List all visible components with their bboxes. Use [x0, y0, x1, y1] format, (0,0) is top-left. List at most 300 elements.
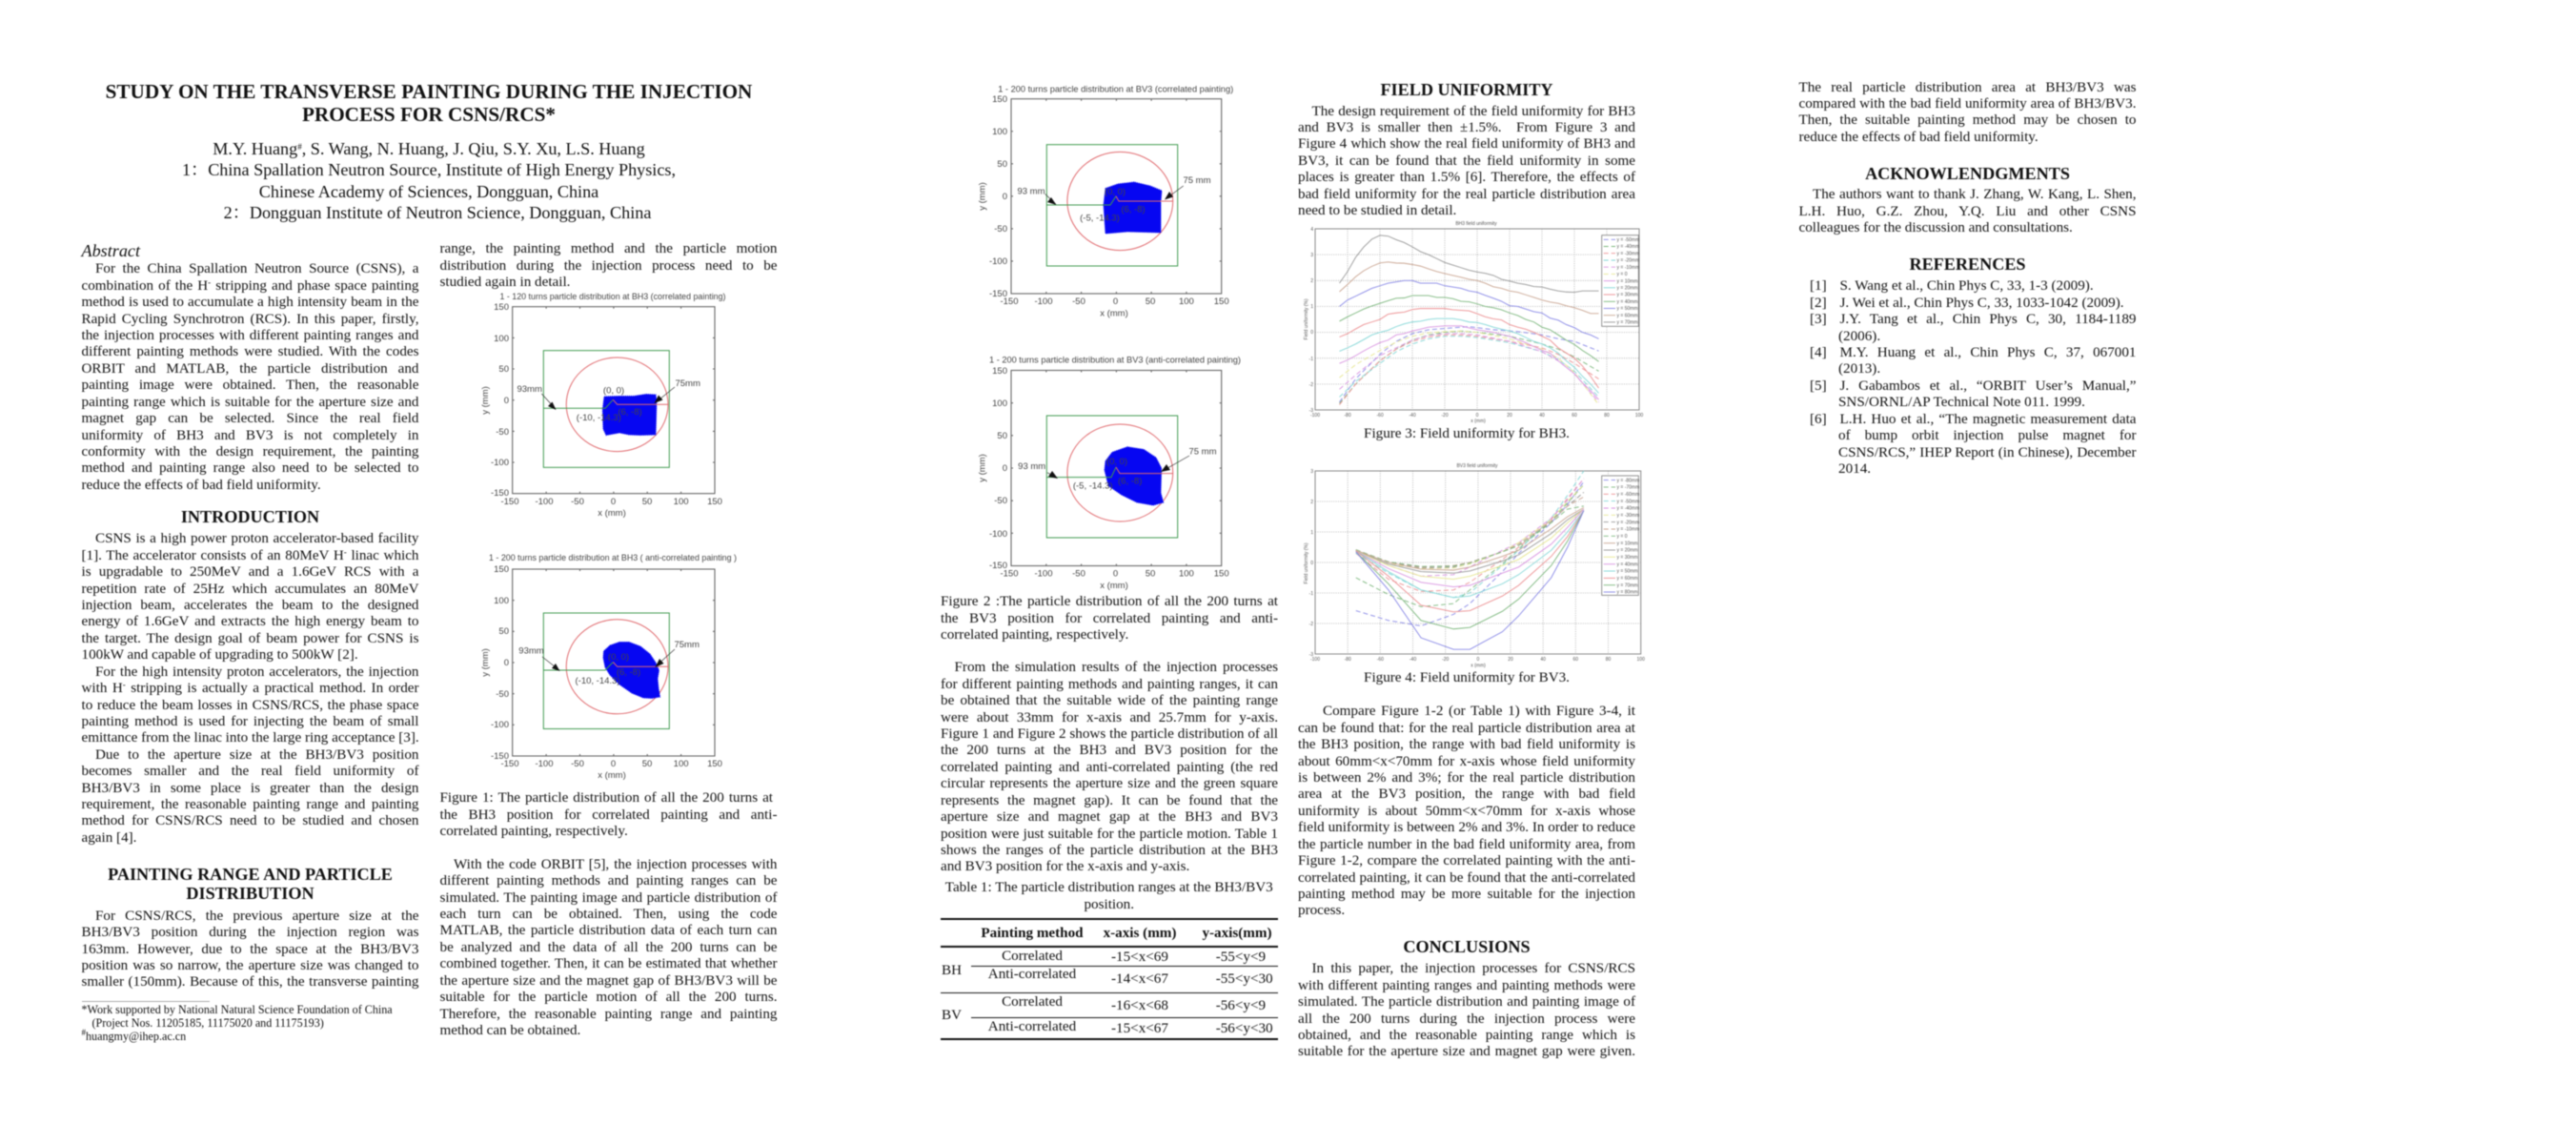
chart: BH3 anti-correlated painting distribution: -150 [491, 751, 509, 762]
chart: BV3 correlated painting distribution: -150 [989, 289, 1007, 299]
chart: BV3 anti-correlated painting distribution: 1 - 200 turns particle distribution at BV3 (anti-correlated painting) [989, 355, 1241, 366]
chart: BH3 field uniformity: 3 [1310, 253, 1313, 258]
chart: BH3 anti-correlated painting distribution: (6, -8) [617, 667, 640, 678]
chart: BH3 correlated painting distribution: y (mm) [480, 386, 491, 415]
chart: BH3 anti-correlated painting distribution: 0 [611, 759, 616, 769]
text: simulation results: the 200 turns at the BH3 and BV3 position for the [941, 743, 1278, 758]
chart: BH3 correlated painting distribution: 50 [642, 497, 652, 507]
chart: BV3 field uniformity: y = 30mm [1616, 555, 1638, 561]
reference numbers: [4] [1810, 345, 1827, 360]
chart: BV3 field uniformity: 60 [1573, 657, 1578, 663]
chart: BH3 field uniformity: y = -10mm [1616, 265, 1639, 271]
chart: BV3 correlated painting distribution: (6, -8) [1121, 204, 1146, 215]
table: particle distribution ranges: -15<x<69 [1111, 950, 1168, 965]
chart: BH3 anti-correlated painting distribution: 100 [494, 596, 509, 606]
reference numbers: [6] [1810, 412, 1827, 427]
chart: BH3 field uniformity: y = 60mm [1616, 313, 1638, 318]
heading: painting range and particle distribution: DISTRIBUTION [186, 884, 314, 903]
chart: BH3 field uniformity: y = 0 [1616, 272, 1628, 277]
text: introduction: to reduce the beam losses in CSNS/RCS, the phase space [82, 698, 419, 713]
chart: BV3 anti-correlated painting distribution: -100 [989, 529, 1007, 540]
text: painting range: For CSNS/RCS, the previous aperture size at the [95, 909, 419, 924]
table: particle distribution ranges: BH [942, 963, 962, 978]
text: introduction: emittance from the linac into the large ring acceptance [3]. [82, 730, 419, 746]
chart: BH3 field uniformity: BH3 field uniformity [1455, 221, 1497, 227]
chart: BV3 anti-correlated painting distribution: 0 [1003, 463, 1007, 474]
chart: BV3 field uniformity: 2 [1310, 500, 1313, 505]
chart: BH3 field uniformity: y = 30mm [1616, 293, 1638, 298]
chart: BV3 field uniformity: x (mm) [1471, 664, 1486, 669]
text: ORBIT simulation [438, 857, 778, 1038]
text: simulation results [940, 660, 1279, 874]
chart: BH3 anti-correlated painting distribution: x (mm) [598, 770, 626, 781]
chart: BH3 correlated painting distribution: 0 [611, 497, 616, 507]
chart: BV3 field uniformity: 3 [1310, 469, 1313, 475]
text: introduction: with H- stripping is actually a practical method. In order [82, 680, 419, 696]
chart: BH3 field uniformity: y = 40mm [1616, 299, 1638, 305]
chart: BV3 anti-correlated painting distribution: -150 [989, 561, 1007, 571]
text: field uniformity: Figure 4 which show the real field uniformity of BH3 and [1298, 136, 1635, 152]
chart: BV3 field uniformity: y = -80mm [1616, 478, 1639, 483]
text: field uniformity: BV3, it can be found that the field uniformity in some [1298, 153, 1635, 169]
chart: BH3 field uniformity: -40 [1409, 413, 1416, 419]
text: ORBIT simulation: combined together. Then, it can be estimated that whether [440, 956, 778, 971]
text: comparison: uniformity is about 50mm<x<70mm for x-axis whose [1298, 804, 1635, 819]
chart: BV3 field uniformity: y = 70mm [1616, 582, 1638, 588]
chart: BH3 anti-correlated painting distribution: -100 [535, 759, 554, 769]
text: simulation results: position were just suitable for the particle motion. Table 1 [941, 827, 1278, 842]
chart: BH3 field uniformity: -2 [1309, 382, 1313, 388]
chart: BV3 anti-correlated painting distribution: (0, 0) [1106, 457, 1127, 467]
text: introduction: method for CSNS/RCS need to be studied and chosen [82, 813, 419, 828]
text: field uniformity: The design requirement of the field uniformity for BH3 [1311, 104, 1635, 119]
text: acknowledgments: colleagues for the discussion and consultations. [1799, 220, 2073, 235]
chart: BH3 field uniformity: y = 10mm [1616, 278, 1638, 284]
text: ORBIT simulation: method can be obtained. [440, 1023, 580, 1038]
chart: BH3 field uniformity: y = 50mm [1616, 306, 1638, 312]
text: field uniformity: bad field uniformity for the real particle distribution area [1298, 187, 1635, 202]
text: abstract: method and painting range also need to be selected to [82, 460, 419, 476]
chart: BV3 correlated painting distribution: -100 [1034, 296, 1053, 307]
chart: BV3 field uniformity: y = 10mm [1616, 541, 1638, 546]
chart: BH3 correlated painting distribution: -50 [571, 497, 584, 507]
chart: BV3 correlated painting distribution [978, 84, 1233, 318]
text: ORBIT simulation: suitable for the particle motion of all the 200 turns. [440, 990, 778, 1005]
text: painting range: smaller (150mm). Because of this, the transverse painting [82, 974, 419, 990]
chart: BV3 field uniformity: BV3 field uniformity [1456, 463, 1498, 469]
authors and affiliations: 2：Dongguan Institute of Neutron Science, Dongguan, China [224, 203, 651, 222]
text: conclusions: simulated. The particle distribution and painting image of [1298, 994, 1635, 1010]
chart: BH3 field uniformity: y = -50mm [1616, 237, 1639, 243]
chart: BH3 anti-correlated painting distribution [480, 553, 738, 781]
chart: BV3 anti-correlated painting distribution: 100 [992, 398, 1007, 409]
reference entries: M.Y. Huang et al., Chin Phys C, 37, 067001 [1839, 345, 2137, 360]
heading: painting range and particle distribution [107, 865, 393, 903]
chart: BH3 correlated painting distribution: 93mm [517, 384, 542, 395]
chart: BV3 correlated painting distribution: -50 [1072, 296, 1085, 307]
text: simulation results: circular represents the aperture size and the green square [941, 776, 1278, 791]
text: introduction: requirement, the reasonable painting range and painting [82, 797, 419, 812]
text: introduction: painting method is used for injecting the beam of small [82, 714, 419, 729]
chart: BH3 correlated painting distribution: -50 [496, 427, 509, 438]
text: comparison: process. [1298, 903, 1345, 918]
chart: BH3 correlated painting distribution: -150 [500, 497, 519, 507]
chart: BH3 field uniformity: 1 [1310, 304, 1313, 310]
text: painting range: 163mm. However, due to the space at the BH3/BV3 [82, 942, 419, 957]
chart: BV3 field uniformity: 0 [1477, 657, 1480, 663]
text: abstract: ORBIT and MATLAB, the particle distribution and [82, 361, 419, 377]
text: introduction: For the high intensity proton accelerators, the injection [95, 664, 419, 680]
text: introduction: repetition rate of 25Hz which accumulates an 80MeV [82, 582, 419, 597]
chart: BH3 field uniformity: 20 [1507, 413, 1512, 419]
text: painting range continued: distribution during the injection process need to be [440, 258, 778, 274]
footnotes: #huangmy@ihep.ac.cn [82, 1028, 186, 1043]
chart: BV3 field uniformity: -1 [1309, 591, 1313, 597]
heading: conclusions: CONCLUSIONS [1403, 937, 1531, 956]
chart: BH3 anti-correlated painting distribution: 50 [498, 626, 509, 637]
chart: BV3 anti-correlated painting distribution [978, 355, 1241, 591]
chart: BV3 field uniformity: 40 [1540, 657, 1546, 663]
chart: BV3 field uniformity: -80 [1345, 657, 1351, 663]
chart: BV3 field uniformity: y = -10mm [1616, 527, 1639, 533]
text: conclusions: all the 200 turns during the injection process were [1298, 1011, 1635, 1027]
text: comparison: field uniformity is between 2% and 3%. In order to reduce [1298, 820, 1635, 835]
authors and affiliations: M.Y. Huang#, S. Wang, N. Huang, J. Qiu, S.Y. Xu, L.S. Huang [213, 139, 645, 158]
table: particle distribution ranges: x-axis (mm) [1104, 926, 1176, 941]
footnotes: *Work supported by National Natural Science Foundation of China [82, 1003, 393, 1016]
caption: figure 2 [940, 594, 1279, 643]
text: ORBIT simulation: the aperture size and the magnet gap of BH3/BV3 will be [440, 973, 778, 989]
chart: BH3 correlated painting distribution: 100 [494, 334, 509, 344]
text: introduction: 100kW and capable of upgrading to 500kW [2]. [82, 647, 358, 663]
text: painting range [81, 909, 419, 990]
chart: BV3 anti-correlated painting distribution: 75 mm [1188, 446, 1217, 458]
chart: BV3 field uniformity: -2 [1309, 622, 1313, 627]
chart: BH3 field uniformity: -1 [1309, 357, 1313, 362]
table: particle distribution ranges: Anti-correlated [988, 967, 1076, 982]
table: particle distribution ranges: -15<x<67 [1111, 1021, 1168, 1036]
chart: BV3 field uniformity: 20 [1508, 657, 1513, 663]
text: ORBIT simulation: be analyzed and the data of all the 200 turns can be [440, 940, 778, 955]
text: introduction: the target. The design goal of beam power for CSNS is [82, 631, 419, 646]
chart: BV3 field uniformity: y = 60mm [1616, 576, 1638, 582]
chart: BV3 field uniformity: -40 [1410, 657, 1416, 663]
heading: painting range and particle distribution: PAINTING RANGE AND PARTICLE [108, 865, 393, 884]
text: painting range: BH3/BV3 position during the injection region was [82, 925, 419, 940]
text: ORBIT simulation: different painting methods and painting ranges can be [440, 873, 778, 889]
reference entries: J.Y. Tang et al., Chin Phys C, 30, 1184-1189 [1839, 312, 2137, 327]
text: abstract: painting image were obtained. Then, the reasonable [82, 378, 419, 393]
text: comparison: painting method may be more suitable for the injection [1298, 887, 1635, 902]
chart: BH3 anti-correlated painting distribution: 75mm [674, 640, 700, 650]
chart: BH3 field uniformity: 2 [1310, 278, 1313, 284]
text: introduction: again [4]. [82, 830, 136, 846]
text: conclusions: suitable for the aperture size and magnet gap were given. [1298, 1044, 1635, 1059]
text: abstract: combination of the H- stripping and phase space painting [82, 277, 418, 294]
title: PROCESS FOR CSNS/RCS* [302, 103, 556, 126]
chart: BV3 correlated painting distribution: -150 [1000, 296, 1019, 307]
reference entries: (2013). [1838, 361, 1880, 377]
text: introduction [81, 531, 419, 846]
chart: BH3 anti-correlated painting distribution: 150 [494, 564, 509, 575]
chart: BV3 anti-correlated painting distribution: (-5, -14.3) [1073, 480, 1113, 492]
chart: BH3 field uniformity: y = 20mm [1616, 286, 1638, 292]
caption: figure 1: Figure 1: The particle distribution of all the 200 turns at [440, 790, 773, 806]
chart: BH3 field uniformity: -100 [1310, 413, 1320, 419]
text: ORBIT simulation: With the code ORBIT [5], the injection processes with [454, 857, 778, 872]
reference entries: (2006). [1838, 329, 1880, 344]
text: abstract: For the China Spallation Neutron Source (CSNS), a [95, 261, 419, 276]
table: particle distribution ranges: Correlated [1002, 993, 1063, 1009]
chart: BV3 correlated painting distribution: 1 - 200 turns particle distribution at BV3 (correlated painting) [998, 84, 1233, 95]
reference numbers: [2] [1810, 296, 1827, 311]
chart: BH3 anti-correlated painting distribution: 0 [504, 658, 509, 668]
text: comparison [1298, 704, 1635, 918]
reference entries: J. Wei et al., Chin Phys C, 33, 1033-1042 (2009). [1839, 296, 2124, 311]
text: abstract: uniformity of BH3 and BV3 is not completely in [82, 428, 419, 443]
text: simulation results: correlated painting and anti-correlated painting (the red [941, 760, 1278, 775]
chart: BV3 field uniformity: y = -20mm [1616, 520, 1639, 525]
chart: BH3 anti-correlated painting distribution: -50 [571, 759, 584, 769]
chart: BH3 correlated painting distribution: 50 [498, 364, 509, 375]
text: introduction: [1]. The accelerator consists of an 80MeV H- linac which [82, 547, 419, 563]
table: particle distribution ranges: -56<y<9 [1216, 998, 1266, 1013]
chart: BH3 correlated painting distribution: (6, -8) [618, 407, 642, 418]
text: comparison: is between 2% and 3%; for the real particle distribution [1298, 770, 1635, 786]
text: acknowledgments: The authors want to thank J. Zhang, W. Kang, L. Shen, [1813, 187, 2137, 202]
chart: BV3 correlated painting distribution: 100 [992, 127, 1007, 137]
caption: figure 3: Figure 3: Field uniformity for BH3. [1364, 426, 1570, 441]
footnotes: (Project Nos. 11205185, 11175020 and 11175193) [91, 1016, 324, 1030]
chart: BH3 field uniformity: -60 [1376, 413, 1384, 419]
chart: BH3 field uniformity: -20 [1441, 413, 1449, 419]
chart: BV3 correlated painting distribution: -100 [989, 256, 1007, 267]
text: introduction: becomes smaller and the real field uniformity of [82, 764, 419, 779]
chart: BH3 anti-correlated painting distribution: 50 [642, 759, 652, 769]
chart: BV3 field uniformity: 80 [1606, 657, 1611, 663]
chart: BH3 correlated painting distribution [480, 292, 726, 519]
table: particle distribution ranges: BV [942, 1008, 962, 1023]
chart: BV3 field uniformity: y = -40mm [1616, 506, 1639, 512]
caption: table 1 [944, 880, 1273, 912]
authors and affiliations: 1：China Spallation Neutron Source, Institute of High Energy Physics, [182, 160, 676, 179]
text: conclusions continued: compared with the bad field uniformity area of BH3/BV3. [1799, 96, 2137, 112]
chart: BV3 anti-correlated painting distribution: 100 [1179, 568, 1194, 580]
chart: BV3 anti-correlated painting distribution: 0 [1113, 568, 1118, 580]
chart: BH3 correlated painting distribution: 1 - 120 turns particle distribution at BH3 (correlated painting) [499, 292, 726, 302]
chart: BV3 field uniformity: y = 40mm [1616, 562, 1638, 567]
text: introduction: injection beam, accelerates the beam to the designed [82, 598, 419, 613]
chart: BV3 anti-correlated painting distribution: -50 [1072, 568, 1085, 580]
reference entries: L.H. Huo et al., “The magnetic measurement data [1839, 412, 2137, 427]
chart: BV3 correlated painting distribution: y (mm) [978, 182, 987, 211]
reference entries: of bump orbit injection pulse magnet for [1838, 428, 2137, 443]
text: conclusions: obtained, and the reasonable painting range which is [1298, 1028, 1635, 1043]
chart: BV3 correlated painting distribution: 50 [997, 159, 1007, 170]
chart: BH3 field uniformity: y = -40mm [1616, 244, 1639, 250]
table: particle distribution ranges: Painting method [981, 926, 1084, 941]
chart: BV3 correlated painting distribution: x (mm) [1100, 309, 1128, 318]
text: conclusions continued [1797, 80, 2137, 145]
text: abstract: Rapid Cycling Synchrotron (RCS). In this paper, firstly, [82, 312, 419, 327]
table: particle distribution ranges: -55<y<9 [1216, 950, 1266, 965]
text: conclusions: In this paper, the injection processes for CSNS/RCS [1311, 961, 1635, 976]
text: simulation results: were about 33mm for x-axis and 25.7mm for y-axis. [941, 710, 1278, 725]
chart: BH3 anti-correlated painting distribution: 1 - 200 turns particle distribution at BH3 ( anti-correlated painting ) [489, 553, 737, 563]
text: field uniformity [1298, 104, 1636, 218]
footnotes [81, 1001, 393, 1043]
chart: BH3 correlated painting distribution: -150 [491, 488, 509, 499]
chart: BV3 field uniformity: y = 80mm [1616, 590, 1638, 596]
text: introduction: Due to the aperture size at the BH3/BV3 position [95, 747, 419, 763]
chart: BH3 field uniformity: 40 [1539, 413, 1545, 419]
text: field uniformity: places is greater than 1.5% [6]. Therefore, the effects of [1298, 170, 1635, 185]
text: introduction: energy of 1.6GeV and extracts the high energy beam to [82, 614, 419, 629]
chart: BH3 correlated painting distribution: 0 [504, 396, 509, 406]
caption: figure 1: correlated painting, respectively. [440, 824, 628, 839]
chart: BV3 field uniformity: 1 [1310, 530, 1313, 536]
reference numbers [1810, 278, 1827, 427]
caption: table 1: position. [1084, 897, 1134, 912]
chart: BH3 field uniformity [1303, 220, 1644, 424]
text: abstract: the injection processes with different painting ranges and [82, 328, 419, 343]
authors and affiliations: Chinese Academy of Sciences, Dongguan, China [259, 182, 598, 201]
text: simulation results: From the simulation results of the injection processes [955, 660, 1278, 675]
chart: BV3 correlated painting distribution: 150 [1214, 296, 1229, 307]
chart: BV3 field uniformity: y = -30mm [1616, 513, 1639, 519]
table: particle distribution ranges: -16<x<68 [1111, 998, 1168, 1013]
chart: BH3 field uniformity: -3 [1309, 408, 1313, 414]
chart: BV3 anti-correlated painting distribution: y (mm) [978, 454, 987, 482]
chart: BV3 field uniformity: -3 [1309, 652, 1313, 658]
title: STUDY ON THE TRANSVERSE PAINTING DURING THE INJECTION [106, 80, 752, 103]
text: painting range continued: range, the painting method and the particle motion [440, 241, 778, 256]
chart: BH3 anti-correlated painting distribution: 93mm [518, 646, 544, 656]
caption: figure 4: Figure 4: Field uniformity for BV3. [1364, 670, 1570, 685]
text: comparison: can be found that: for the real particle distribution area at [1298, 721, 1635, 736]
text: painting range continued [439, 241, 778, 290]
text: introduction: CSNS is a high power proton accelerator-based facility [95, 531, 419, 546]
text: comparison: Compare Figure 1-2 (or Table 1) with Figure 3-4, it [1323, 704, 1635, 719]
reference entries: S. Wang et al., Chin Phys C, 33, 1-3 (2009). [1839, 278, 2094, 294]
chart: BV3 field uniformity: Field uniformity (%) [1304, 542, 1309, 584]
table: particle distribution ranges: Correlated [1002, 949, 1063, 964]
chart: BH3 anti-correlated painting distribution: y (mm) [480, 648, 491, 677]
text: conclusions continued: The real particle distribution area at BH3/BV3 was [1799, 80, 2137, 95]
chart: BV3 anti-correlated painting distribution: 150 [992, 366, 1007, 377]
chart: BH3 field uniformity: y = -20mm [1616, 258, 1639, 264]
chart: BH3 field uniformity: 0 [1310, 330, 1313, 336]
chart: BH3 anti-correlated painting distribution: (-10, -14.3) [576, 676, 619, 686]
text: abstract: different painting methods were studied. With the codes [82, 344, 419, 359]
chart: BV3 correlated painting distribution: 150 [992, 94, 1007, 105]
heading: references: REFERENCES [1909, 255, 2026, 274]
chart: BV3 anti-correlated painting distribution: x (mm) [1100, 581, 1128, 591]
text: introduction: is upgradable to 250MeV and a 1.6GeV RCS with a [82, 564, 419, 580]
caption: figure 2: Figure 2 :The particle distribution of all the 200 turns at [941, 594, 1278, 609]
reference numbers: [3] [1810, 312, 1827, 327]
chart: BV3 correlated painting distribution: 75 mm [1183, 175, 1211, 186]
chart: BH3 anti-correlated painting distribution: -150 [500, 759, 519, 769]
text: ORBIT simulation: MATLAB, the particle distribution data of each turn can [440, 923, 778, 938]
chart: BV3 correlated painting distribution: 50 [1146, 296, 1155, 307]
table: particle distribution ranges [940, 917, 1279, 1041]
reference entries [1837, 278, 2137, 477]
chart: BV3 field uniformity: -60 [1377, 657, 1384, 663]
reference entries: 2014. [1838, 461, 1871, 477]
chart: BV3 field uniformity: y = -70mm [1616, 485, 1639, 491]
text: simulation results: and BV3 position for the x-axis and y-axis. [941, 859, 1189, 874]
chart: BV3 correlated painting distribution: (0, 0) [1105, 187, 1126, 197]
chart: BV3 correlated painting distribution: 0 [1003, 192, 1007, 202]
chart: BH3 field uniformity: y = 70mm [1616, 320, 1638, 326]
chart: BH3 correlated painting distribution: -100 [491, 458, 509, 468]
chart: BV3 correlated painting distribution: 93 mm [1017, 187, 1045, 196]
text: acknowledgments [1798, 187, 2137, 235]
chart: BH3 correlated painting distribution: x (mm) [598, 508, 626, 519]
chart: BV3 anti-correlated painting distribution: 93 mm [1018, 461, 1045, 472]
chart: BH3 correlated painting distribution: 150 [707, 497, 722, 507]
caption: figure 1 [439, 790, 778, 839]
text: field uniformity: and BV3 is smaller then ±1.5%. From Figure 3 and [1298, 120, 1635, 135]
reference numbers: [1] [1810, 278, 1827, 294]
text: conclusions [1298, 961, 1636, 1059]
chart: BH3 correlated painting distribution: (0, 0) [603, 385, 624, 397]
chart: BV3 correlated painting distribution: 0 [1113, 296, 1118, 307]
chart: BH3 field uniformity: 100 [1635, 413, 1643, 419]
text: abstract: magnet gap can be selected. Since the real field [82, 411, 419, 426]
text: introduction: BH3/BV3 in some place is greater than the design [82, 781, 419, 796]
heading: field uniformity: FIELD UNIFORMITY [1380, 80, 1553, 99]
chart: BV3 field uniformity: y = 0 [1616, 534, 1628, 540]
text: simulation results: for different painting methods and painting ranges, it can [941, 677, 1278, 692]
text: conclusions continued: Then, the suitable painting method may be chosen to [1799, 112, 2137, 128]
text: field uniformity: need to be studied in detail. [1298, 203, 1456, 218]
chart: BH3 anti-correlated painting distribution: -50 [496, 689, 509, 700]
chart: BH3 anti-correlated painting distribution: 100 [674, 759, 689, 769]
chart: BV3 field uniformity: -20 [1442, 657, 1450, 663]
abstract heading: Abstract [82, 241, 140, 260]
chart: BV3 anti-correlated painting distribution: -50 [994, 496, 1007, 506]
chart: BH3 field uniformity: x (mm) [1471, 419, 1486, 424]
heading: introduction: INTRODUCTION [181, 507, 319, 526]
chart: BV3 field uniformity: y = 50mm [1616, 569, 1638, 575]
caption: figure 1: the BH3 position for correlated painting and anti- [440, 807, 778, 823]
chart: BH3 anti-correlated painting distribution: (0, 0) [608, 652, 629, 663]
text: abstract: painting range which is suitable for the aperture size and [82, 395, 419, 410]
chart: BV3 field uniformity: 0 [1310, 561, 1313, 566]
text: abstract: conformity with the design requirement, the painting [82, 444, 419, 460]
chart: BH3 anti-correlated painting distribution: 150 [707, 759, 722, 769]
chart: BH3 field uniformity: -80 [1344, 413, 1351, 419]
chart: BH3 correlated painting distribution: 75mm [675, 378, 700, 389]
text: simulation results: Figure 1 and Figure 2 shows the particle distribution of all [941, 726, 1278, 742]
table: particle distribution ranges: Anti-correlated [988, 1019, 1076, 1034]
text: ORBIT simulation: simulated. The painting image and particle distribution of [440, 890, 778, 906]
text: comparison: correlated painting, it can be found that the anti-correlated [1298, 870, 1635, 886]
text: ORBIT simulation: each turn can be obtained. Then, using the code [440, 907, 778, 922]
reference entries: SNS/ORNL/AP Technical Note 011. 1999. [1838, 395, 2085, 410]
chart: BV3 correlated painting distribution: -50 [994, 224, 1007, 235]
table: particle distribution ranges: -55<y<30 [1216, 971, 1273, 987]
chart: BV3 anti-correlated painting distribution: 50 [997, 431, 1007, 441]
chart: BH3 correlated painting distribution: 100 [674, 497, 689, 507]
text: conclusions continued: reduce the effects of bad field uniformity. [1799, 130, 2038, 145]
caption: figure 2: correlated painting, respectively. [941, 627, 1128, 643]
heading: acknowledgments: ACKNOWLENDGMENTS [1865, 164, 2070, 183]
chart: BV3 anti-correlated painting distribution: 150 [1214, 568, 1229, 580]
chart: BH3 correlated painting distribution: -100 [535, 497, 554, 507]
